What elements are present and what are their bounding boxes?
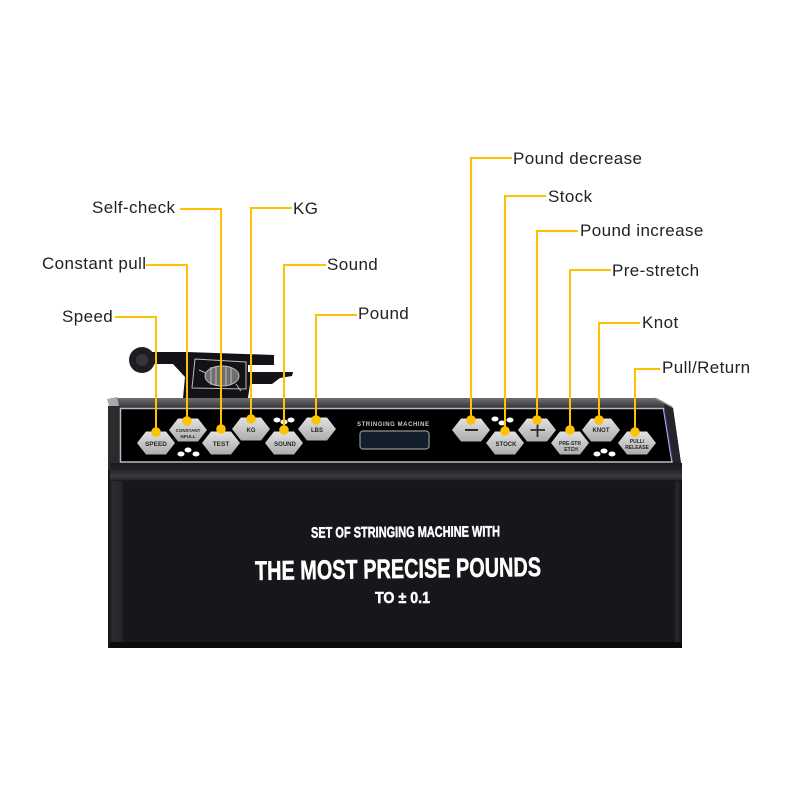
callout: pound decrease xyxy=(466,149,642,425)
button: lbs xyxy=(298,418,336,440)
band under control panel xyxy=(110,463,682,481)
callout: pre-stretch xyxy=(565,261,700,435)
callout: pound: Pound xyxy=(358,304,409,323)
indicator lights: right xyxy=(594,448,616,456)
caption line 1: SET OF STRINGING MACHINE WITH xyxy=(311,523,500,542)
button: pre-stretch: ETCH xyxy=(564,447,578,453)
callout: speed: Speed xyxy=(62,307,113,326)
button: test: TEST xyxy=(213,441,229,448)
button: knot: KNOT xyxy=(592,428,610,434)
button: test xyxy=(202,432,240,454)
callout: pound xyxy=(311,304,409,425)
control panel xyxy=(120,408,672,462)
body top rim xyxy=(108,398,682,470)
icon: racket sticker xyxy=(192,359,246,391)
callout: knot xyxy=(594,313,679,425)
callout: constant pull: Constant pull xyxy=(42,254,146,273)
handle: tension arm with ball knob xyxy=(129,347,293,398)
display screen xyxy=(360,431,429,449)
indicator lights: stock xyxy=(492,416,514,426)
button: sound: SOUND xyxy=(274,442,296,448)
button: speed xyxy=(137,432,175,454)
callout: stock: Stock xyxy=(548,187,593,206)
caption line 2: THE MOST PRECISE POUNDS xyxy=(255,552,541,586)
callout: stock xyxy=(500,187,593,436)
callout: pull/return xyxy=(630,358,750,437)
button: pull release xyxy=(618,432,656,454)
button: plus xyxy=(518,418,556,442)
callout: pound increase: Pound increase xyxy=(580,221,704,240)
button: knot xyxy=(582,418,620,442)
button: stock: STOCK xyxy=(496,442,517,448)
callout: pre-stretch: Pre-stretch xyxy=(612,261,700,280)
body caption xyxy=(255,523,541,607)
callout: speed xyxy=(62,307,161,437)
button: pre-stretch xyxy=(551,432,589,454)
button: stock xyxy=(486,432,524,454)
callout: sound xyxy=(279,255,378,435)
machine body xyxy=(107,397,682,648)
button: constant pull: NPULL xyxy=(180,434,196,439)
display label: STRINGING MACHINE xyxy=(357,422,429,428)
callout: pound increase xyxy=(532,221,704,425)
callout: kg xyxy=(246,199,318,424)
button: pull release: RELEASE xyxy=(625,445,649,451)
indicator lights: left xyxy=(178,448,200,456)
button: pre-stretch: PRE-STR xyxy=(559,441,581,447)
callout: constant pull xyxy=(42,254,192,426)
button: speed: SPEED xyxy=(145,441,167,448)
button: lbs: LBS xyxy=(311,428,323,434)
body front xyxy=(108,470,682,648)
callout: knot: Knot xyxy=(642,313,679,332)
button: minus xyxy=(452,418,490,442)
callout: pull/return: Pull/Return xyxy=(662,358,750,377)
callout: pound decrease: Pound decrease xyxy=(513,149,642,168)
button: pull release: PULL/ xyxy=(630,439,645,445)
button: kg xyxy=(232,418,270,440)
callout: self-check xyxy=(92,198,226,434)
indicator lights: sound xyxy=(274,418,294,424)
caption line 3: TO ± 0.1 xyxy=(375,590,430,607)
callout: self-check: Self-check xyxy=(92,198,175,217)
button: constant pull xyxy=(169,418,207,442)
button: constant pull: CONSTANT xyxy=(176,428,201,433)
button: sound xyxy=(265,432,303,454)
callout: sound: Sound xyxy=(327,255,378,274)
callout: kg: KG xyxy=(293,199,318,218)
button: kg: KG xyxy=(246,428,256,434)
